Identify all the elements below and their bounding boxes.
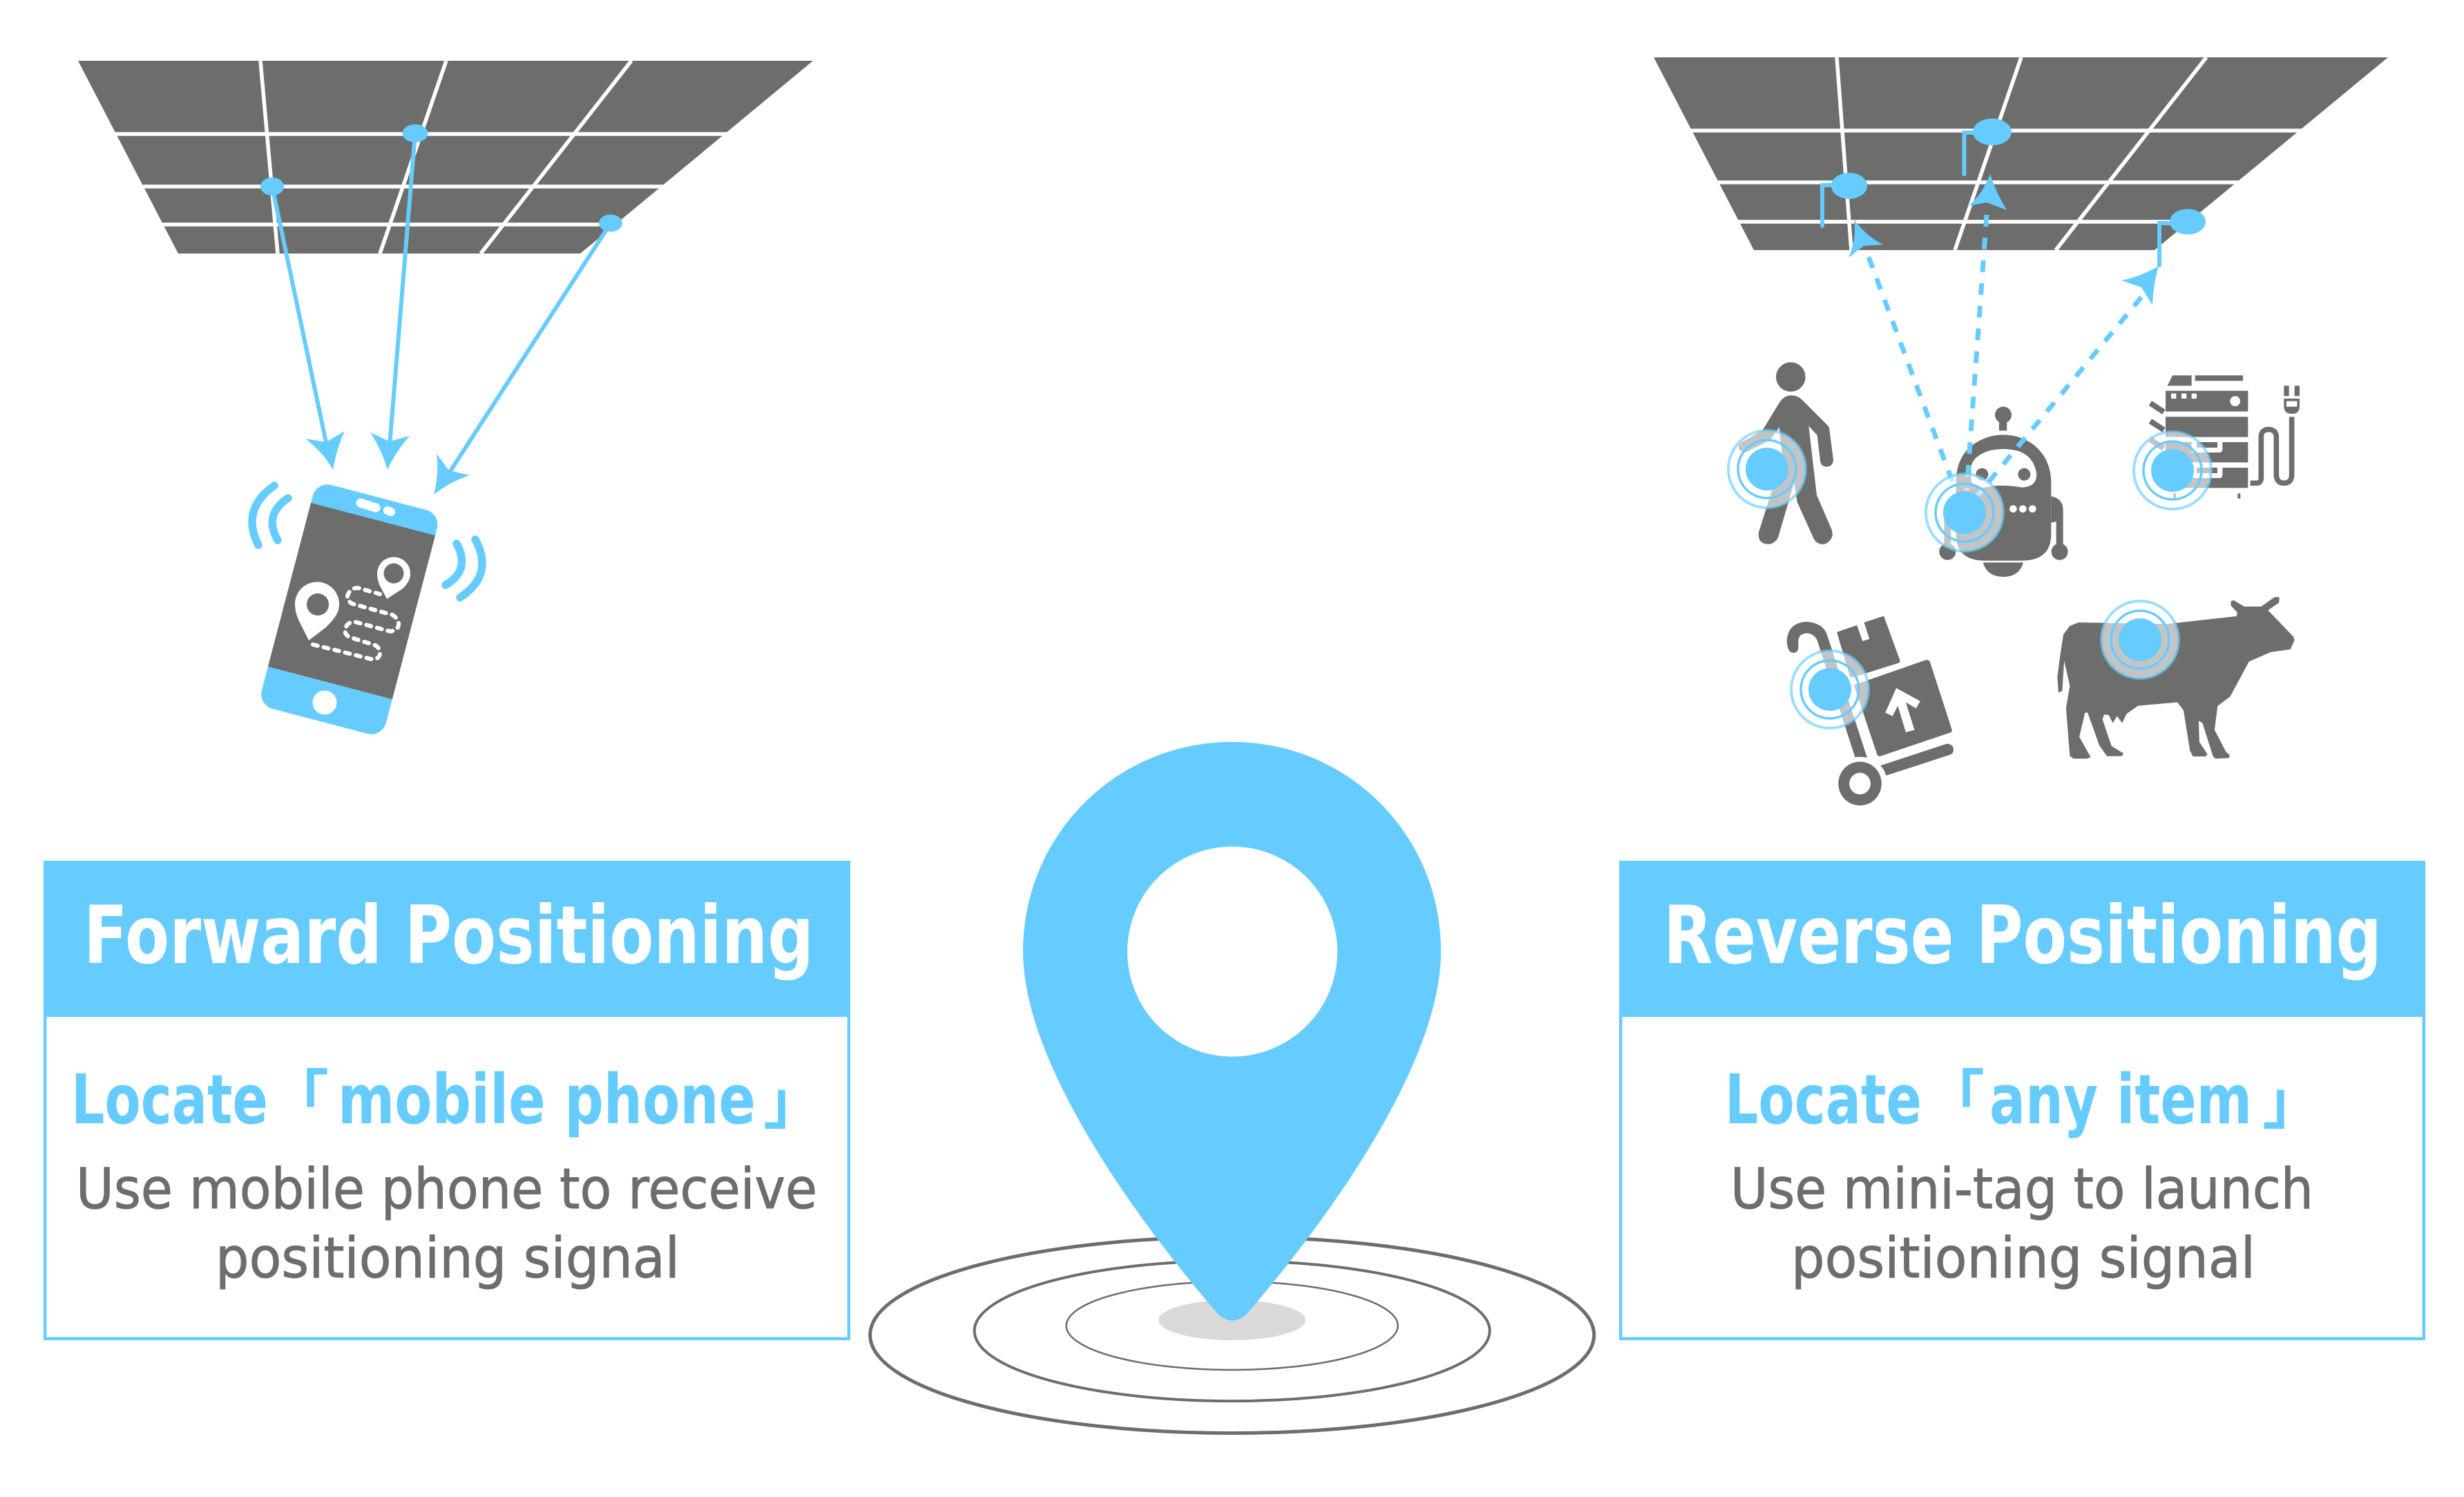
location tag on robot	[1926, 474, 2003, 551]
description: forward positioning: Use mobile phone to receive	[76, 1157, 817, 1222]
icon: walking person	[1739, 362, 1833, 544]
description: forward positioning	[76, 1157, 817, 1291]
central location pin with target rings	[870, 742, 1594, 1433]
ceiling grid: reverse	[1654, 57, 2388, 250]
icon: cow	[2057, 597, 2295, 759]
subheading: locate any item: 」	[2262, 1068, 2323, 1136]
location tag on person	[1728, 430, 1806, 508]
icon: hand trolley with boxes	[1787, 616, 1954, 805]
subheading: locate any item	[1725, 1060, 2323, 1140]
subheading: locate any item: any item	[1989, 1060, 2252, 1140]
subheading: locate mobile phone: mobile phone	[338, 1060, 756, 1140]
description: reverse positioning: Use mini-tag to launch	[1730, 1157, 2313, 1222]
subheading: locate mobile phone: 」	[763, 1068, 824, 1136]
description: reverse positioning: positioning signal	[1791, 1226, 2255, 1291]
location tag on cow	[2101, 601, 2179, 678]
panel: reverse positioning text box	[1619, 861, 2425, 1339]
icon: office printer with plug	[2149, 375, 2300, 499]
subheading: locate mobile phone: 「	[268, 1065, 329, 1133]
target rings	[870, 1237, 1594, 1433]
subheading: locate mobile phone: Locate	[71, 1060, 268, 1140]
location tag on trolley	[1791, 651, 1869, 728]
icon: smartphone with map route	[252, 481, 482, 738]
description: reverse positioning	[1730, 1157, 2313, 1291]
map pin	[1023, 742, 1441, 1321]
ceiling grid: forward	[78, 61, 813, 254]
pin shadow	[1158, 1300, 1306, 1340]
subheading: locate mobile phone	[71, 1060, 824, 1140]
panel: forward positioning illustration	[78, 61, 813, 738]
dashed uplink signals with arrowheads	[1849, 174, 2159, 495]
panel: forward positioning text box	[44, 861, 850, 1339]
icon: robot	[1939, 407, 2068, 577]
description: forward positioning: positioning signal	[216, 1226, 680, 1291]
signal arrows: beacons to phone	[260, 124, 622, 495]
heading: forward positioning: Forward Positioning	[84, 889, 814, 982]
panel: reverse positioning illustration	[1654, 57, 2388, 805]
subheading: locate any item: 「	[1924, 1065, 1985, 1133]
location tag on printer	[2134, 432, 2211, 509]
subheading: locate any item: Locate	[1725, 1060, 1922, 1140]
ceiling receivers with antennas	[1822, 119, 2206, 265]
